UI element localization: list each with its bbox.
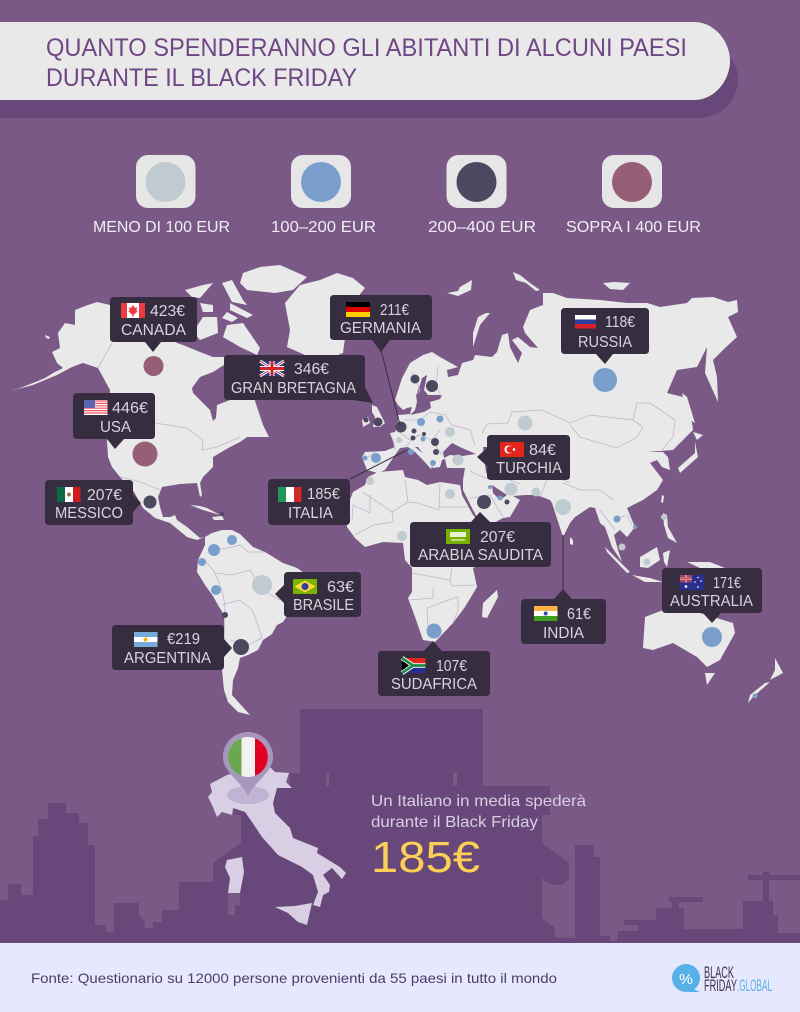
title banner [0,22,738,118]
callout: Italia: ITALIA [288,505,334,522]
dots: under 100 [252,416,667,595]
dots: 200-400 [144,374,510,655]
legend [93,155,701,236]
callout: Arabia Saudita: 207€ [480,529,515,546]
flag: Turchia [500,442,524,457]
callout: Russia: 118€ [605,314,635,331]
flag: USA [84,400,108,415]
heading [46,34,687,92]
flag: Brasile [293,579,317,594]
callout: India: INDIA [543,625,585,642]
Italy silhouette [208,767,346,925]
flag: Germania [346,302,370,317]
logo: FRIDAY [704,977,737,995]
callout: Italia [268,479,350,525]
flag: Arabia Saudita [446,529,470,544]
flag: Sudafrica [402,658,426,673]
legend item: 200-400: 200–400 EUR [428,219,536,236]
legend item: 200-400 [428,155,536,236]
Italy statistic: 185€ [371,833,480,882]
callout: India [521,589,606,644]
callout: Canada: CANADA [121,322,187,339]
legend item: 100-200 [271,155,376,236]
inland seas [192,365,507,500]
Italy map with pin [208,732,346,925]
callout: Germania [330,295,432,352]
callout: Arabia Saudita [410,512,551,567]
flag: Australia [680,575,704,590]
logo [672,964,772,995]
callout: Australia: 171€ [713,575,741,592]
callout: Brasile [275,572,361,617]
flag: Messico [57,487,80,502]
legend item: 100-200: 100–200 EUR [271,219,376,236]
callout: Brasile: 63€ [327,579,354,596]
callout: USA: USA [100,419,132,436]
callout: Arabia Saudita: ARABIA SAUDITA [418,547,544,564]
callout: Germania: GERMANIA [340,320,422,337]
callout: Messico: 207€ [87,487,122,504]
legend item: sopra 400: SOPRA I 400 EUR [566,219,701,236]
callout: Australia [662,568,762,623]
flag: Gran Bretagna [260,361,284,376]
legend item: meno di 100: MENO DI 100 EUR [93,219,230,236]
world map [10,265,783,715]
callout: Messico [45,480,141,525]
Italy statistic: durante il Black Friday [371,814,538,831]
leader lines [350,350,563,590]
callout: Argentina: ARGENTINA [124,650,212,667]
callout: Canada [110,297,197,352]
logo: % [679,971,693,988]
country borders [98,343,675,650]
legend item: meno di 100 [93,155,230,236]
dots: over 400 [132,356,164,466]
flag: Canada [121,303,145,318]
footer [0,943,800,1012]
callout: Sudafrica [378,641,490,696]
callout: Brasile: BRASILE [293,597,354,614]
legend item: sopra 400 [566,155,701,236]
callout: Turchia: TURCHIA [496,460,563,477]
callout: Russia [561,308,649,364]
callout: Sudafrica: SUDAFRICA [391,676,478,693]
callout: USA [73,393,155,449]
callout: USA: 446€ [112,400,148,417]
flag: India [534,606,558,621]
callout: Argentina [112,625,232,670]
data dots [132,356,758,698]
callout: India: 61€ [567,606,591,623]
callout: Germania: 211€ [380,302,409,319]
dots: 100-200 [198,368,758,698]
flag: Russia [575,315,596,328]
callout: Gran Bretagna [224,355,373,403]
Italy statistic: Un Italiano in media spederà [371,793,586,810]
callout: Turchia: 84€ [529,442,556,459]
callout: Russia: RUSSIA [578,334,633,351]
callout: Argentina: €219 [167,631,200,648]
skyline background with billboard [0,709,800,943]
land masses [10,265,783,715]
callout: Turchia [477,435,570,480]
pin base shadow [227,786,269,804]
flag: Argentina [134,632,158,647]
source note: Fonte: Questionario su 12000 persone provenienti da 55 paesi in tutto il mondo [31,970,557,986]
logo: BLACK [704,964,734,982]
callout: Messico: MESSICO [55,505,123,522]
callout: Italia: 185€ [307,486,340,503]
callout: Sudafrica: 107€ [436,658,467,675]
heading: DURANTE IL BLACK FRIDAY [46,64,357,92]
callout: Australia: AUSTRALIA [670,593,754,610]
callout: Canada: 423€ [150,303,185,320]
callout: Gran Bretagna: GRAN BRETAGNA [231,380,357,397]
flag: Italia [278,487,302,502]
callout: Gran Bretagna: 346€ [294,361,329,378]
map pin with Italian flag [223,732,273,796]
Italy statistic [371,793,586,882]
heading: QUANTO SPENDERANNO GLI ABITANTI DI ALCUNI PAESI [46,34,687,62]
